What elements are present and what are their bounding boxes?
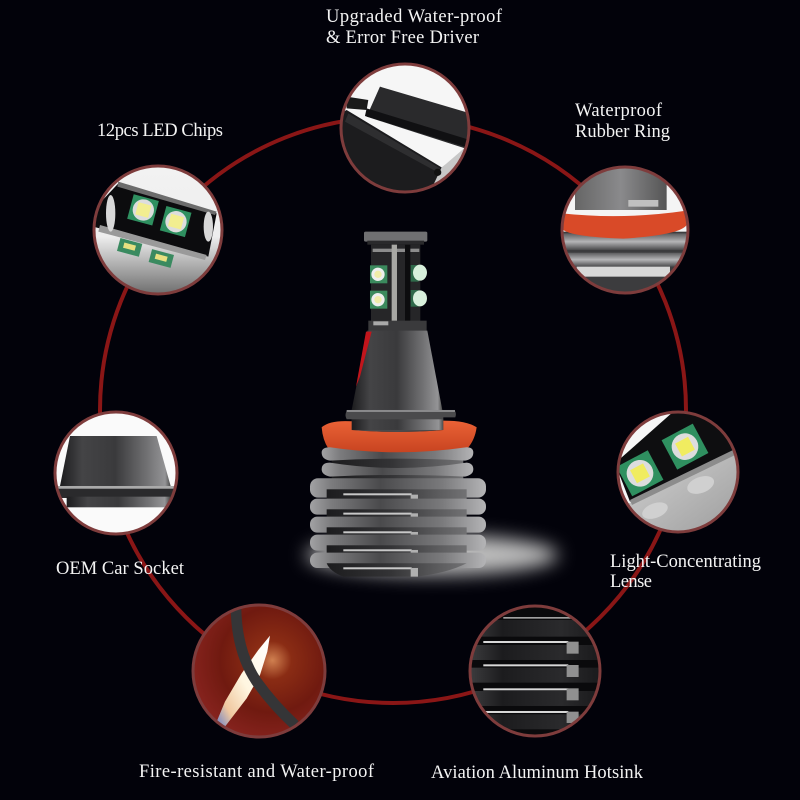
label: rubber ring: Waterproof bbox=[575, 101, 663, 121]
label: OEM socket: OEM Car Socket bbox=[56, 559, 185, 579]
label: lens: Lense bbox=[610, 572, 652, 592]
label: LED chips: 12pcs LED Chips bbox=[97, 121, 223, 141]
thumbnail: rubber ring bbox=[560, 166, 690, 295]
bulb top cap bbox=[364, 232, 427, 245]
thumbnail: flame and cable bbox=[192, 604, 326, 738]
label: rubber ring: Rubber Ring bbox=[575, 122, 670, 142]
connecting ring bbox=[100, 117, 686, 703]
label: driver: & Error Free Driver bbox=[326, 28, 479, 48]
aluminium heat sink fins bbox=[310, 447, 486, 577]
label: driver bbox=[326, 7, 503, 48]
label: rubber ring bbox=[575, 101, 670, 142]
central LED bulb bbox=[310, 232, 486, 577]
label: driver: Upgraded Water-proof bbox=[326, 7, 503, 27]
label: lens bbox=[610, 552, 761, 592]
LED circuit column bbox=[368, 245, 427, 331]
label: fire-resistant: Fire-resistant and Water-proof bbox=[139, 762, 375, 782]
thumbnail: light-concentrating lens bbox=[616, 410, 740, 534]
label: lens: Light-Concentrating bbox=[610, 552, 761, 572]
socket flange bbox=[345, 410, 456, 432]
label: hotsink: Aviation Aluminum Hotsink bbox=[431, 763, 644, 783]
thumbnail: OEM car socket bbox=[55, 411, 177, 535]
floor glow under bulb bbox=[306, 535, 558, 575]
thumbnail: aluminum hotsink bbox=[470, 604, 600, 738]
orange rubber ring bbox=[322, 421, 477, 454]
socket cone bbox=[352, 331, 442, 410]
thumbnail: LED chips bbox=[93, 165, 223, 295]
thumbnail: driver bbox=[340, 63, 470, 197]
